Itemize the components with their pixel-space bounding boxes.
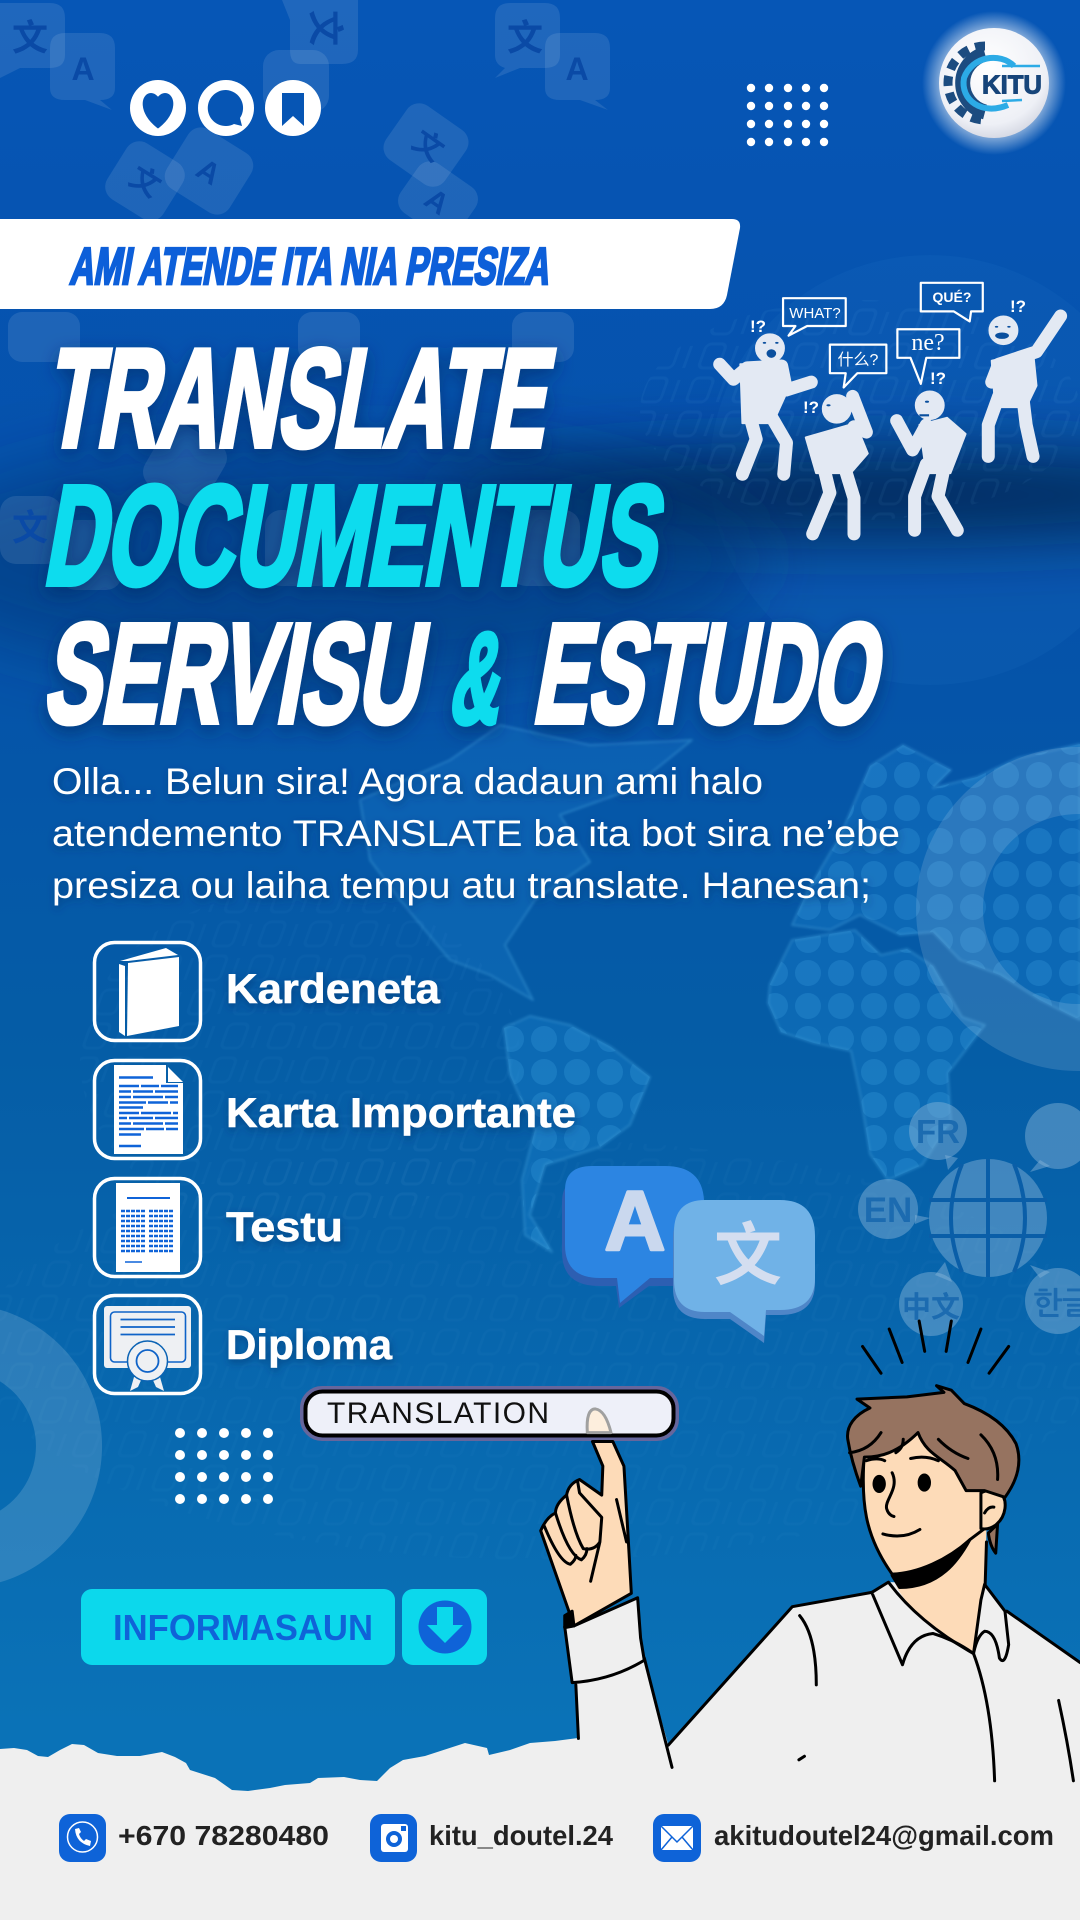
illustration: confused people: !? [930, 369, 946, 388]
torn paper footer [0, 1738, 1080, 1920]
background: faint translate bubbles: 文 [305, 10, 346, 46]
contact: instagram: kitu_doutel.24 [429, 1820, 613, 1851]
decorative ring right [916, 747, 1080, 1071]
contact: phone: +670 78280480 [118, 1820, 329, 1851]
hair [848, 1386, 1019, 1497]
title line: servisu & estudo: & [442, 605, 518, 751]
icon: translate bubbles: 文 [714, 1200, 782, 1299]
language globe cluster [858, 1102, 1080, 1336]
contact: email: akitudoutel24@gmail.com [714, 1820, 1054, 1851]
background: faint translate bubbles: 文 [507, 17, 543, 58]
contact: phone [59, 1814, 329, 1862]
illustration: confused people: !? [803, 398, 819, 417]
illustration: confused people: ne? [911, 330, 945, 356]
icon: document [114, 1065, 183, 1154]
illustration: confused people: !? [1010, 297, 1026, 316]
background: faint translate bubbles: 文 [406, 124, 449, 169]
title line: documentus: DOCUMENTUS [37, 457, 676, 615]
neck shadow [892, 1540, 970, 1588]
illustration: confused people: WHAT? [789, 305, 841, 322]
button: informasaun [81, 1589, 395, 1665]
item: testu [94, 1178, 343, 1276]
banner heading: AMI ATENDE ITA NIA PRESIZA [67, 238, 556, 296]
banner [0, 219, 740, 309]
item: kardeneta [94, 942, 441, 1040]
search bar [302, 1388, 677, 1439]
contact: email [653, 1814, 1054, 1862]
item: testu: Testu [226, 1203, 343, 1250]
logo KITU: KITU [982, 70, 1042, 100]
icon: certificate [104, 1306, 191, 1391]
background: map binary dots [504, 744, 1080, 1252]
icon: text page [116, 1183, 180, 1272]
background: faint translate bubbles: A [565, 51, 589, 87]
item: karta importante [94, 1060, 576, 1158]
title [37, 320, 896, 753]
title line: servisu & estudo: SERVISU [37, 595, 439, 753]
dots top [747, 84, 828, 146]
background: faint translate bubbles: A [71, 51, 95, 87]
logo KITU [922, 11, 1066, 155]
background: faint translate bubbles: 文 [12, 507, 48, 548]
illustration: confused people: !? [750, 317, 766, 336]
background: faint translate bubbles: A [190, 153, 226, 192]
cuff [565, 1598, 644, 1683]
background: faint translate bubbles: 文 [12, 17, 48, 58]
decorative ring left [0, 1304, 102, 1588]
search bar: TRANSLATION [327, 1397, 549, 1430]
background: world map [360, 725, 1080, 1252]
paragraph: atendemento TRANSLATE ba ita bot sira ne’ebe [52, 813, 900, 854]
language globe cluster: 中文 [902, 1291, 960, 1324]
language globe cluster: FR [916, 1113, 960, 1150]
item: diploma: Diploma [226, 1321, 393, 1368]
neck [892, 1529, 986, 1654]
title line: translate: TRANSLATE [39, 320, 565, 476]
face [863, 1413, 998, 1574]
collar [872, 1584, 1009, 1665]
dots lower [175, 1428, 273, 1504]
nose and mouth [883, 1473, 920, 1536]
fingertip [587, 1409, 611, 1433]
icon: translate bubbles: A [605, 1174, 665, 1268]
icon: book [119, 948, 179, 1036]
item: karta importante: Karta Importante [226, 1089, 576, 1136]
button: informasaun: INFORMASAUN [113, 1607, 373, 1648]
illustration: confused people: QUÉ? [933, 289, 971, 305]
paragraph: Olla... Belun sira! Agora dadaun ami halo [52, 761, 763, 802]
background: faint translate bubbles: 文 [123, 160, 166, 204]
button: download arrow [402, 1589, 487, 1665]
item: diploma [94, 1296, 393, 1394]
icon: translate bubbles [562, 1166, 815, 1343]
ear [981, 1490, 1005, 1529]
illustration: confused people: 什么? [838, 351, 879, 369]
rays [863, 1321, 1009, 1373]
illustration: man pointing [541, 1321, 1080, 1800]
contact: instagram [370, 1814, 613, 1862]
hand [541, 1442, 631, 1626]
background: faint translate bubbles [0, 0, 610, 590]
illustration: confused people [720, 283, 1061, 534]
background: faint translate bubbles: A [418, 182, 455, 222]
icons: like, comment, save [130, 80, 321, 136]
language globe cluster: EN [864, 1191, 912, 1230]
item: kardeneta: Kardeneta [226, 965, 441, 1012]
shirt [576, 1582, 1080, 1800]
eyes and brows [874, 1476, 884, 1492]
paragraph: presiza ou laiha tempu atu translate. Hanesan; [52, 865, 871, 906]
paragraph [52, 761, 900, 906]
